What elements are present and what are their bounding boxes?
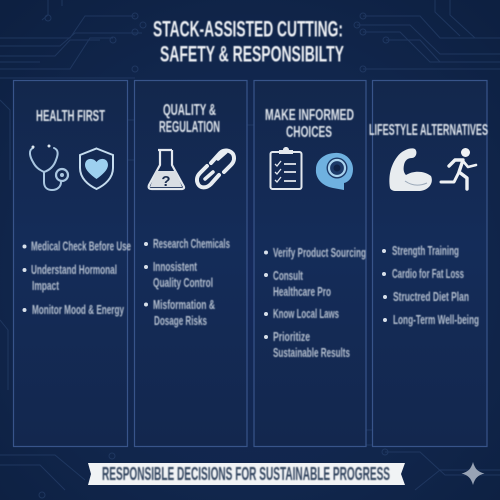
list: quality and regulation: Quality Control xyxy=(153,275,213,290)
icon: sparkle star xyxy=(462,462,484,485)
panel: make informed choices xyxy=(254,80,366,446)
title: STACK-ASSISTED CUTTING: xyxy=(153,16,343,42)
banner xyxy=(88,463,405,485)
list: health first: Medical Check Before Use xyxy=(31,238,131,254)
list: health first: Impact xyxy=(32,278,59,293)
icon: broken chain link xyxy=(197,150,234,187)
list: make informed choices: Consult xyxy=(273,268,303,283)
title: SAFETY & RESPONSIBILTY xyxy=(160,42,344,66)
icon: runner xyxy=(441,148,476,189)
list: lifestyle alternatives: Strength Training xyxy=(392,243,459,258)
list: quality and regulation: Innosistent xyxy=(153,259,197,274)
heading: make informed choices xyxy=(265,107,354,141)
heading: quality and regulation xyxy=(159,102,220,136)
list: health first: Monitor Mood & Energy xyxy=(32,302,124,317)
icon: flask with question mark: ? xyxy=(161,173,171,190)
icon: stethoscope xyxy=(30,144,68,190)
list: lifestyle alternatives xyxy=(382,243,479,327)
list: make informed choices: Prioritize xyxy=(273,329,310,344)
icon: flexed arm xyxy=(389,148,432,191)
list: make informed choices: Verify Product Sourcing xyxy=(273,245,366,260)
title xyxy=(153,16,344,66)
list: quality and regulation: Dosage Risks xyxy=(154,313,207,328)
heading: health first: HEALTH FIRST xyxy=(36,108,105,125)
list: quality and regulation: Research Chemicals xyxy=(153,236,230,251)
icon: flask with question mark xyxy=(149,150,184,190)
panel: lifestyle alternatives xyxy=(369,80,488,446)
list: make informed choices: Know Local Laws xyxy=(273,306,339,321)
icon: brain with gear xyxy=(316,153,353,190)
list: quality and regulation: Misformation & xyxy=(153,297,215,312)
list: quality and regulation xyxy=(144,236,230,328)
heading: quality and regulation: REGULATION xyxy=(159,119,220,136)
icon: shield with heart xyxy=(80,148,113,189)
heading: make informed choices: CHOICES xyxy=(286,124,332,141)
icon: clipboard checklist xyxy=(270,147,302,189)
list: make informed choices: Sustainable Results xyxy=(273,345,350,360)
panel: health first xyxy=(14,80,128,446)
panel: quality and regulation xyxy=(134,80,247,446)
list: make informed choices: Healthcare Pro xyxy=(273,284,331,299)
list: health first: Understand Hormonal xyxy=(31,262,117,277)
list: make informed choices xyxy=(264,245,366,360)
list: health first xyxy=(22,238,131,317)
heading: make informed choices: MAKE INFORMED xyxy=(265,107,354,124)
heading: quality and regulation: QUALITY & xyxy=(163,102,216,119)
